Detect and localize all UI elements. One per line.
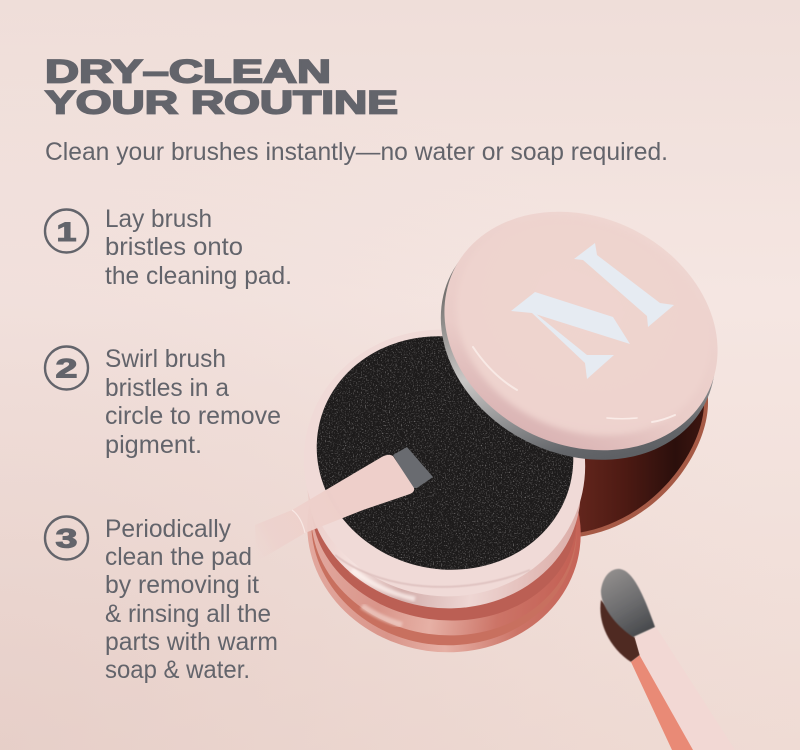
handle	[255, 455, 414, 562]
pot rim	[279, 304, 610, 622]
lid	[399, 168, 757, 506]
lid edge	[405, 168, 757, 494]
step 3 text: & rinsing all the	[105, 600, 271, 628]
bristles	[393, 447, 433, 488]
step 3 text: by removing it	[105, 571, 259, 599]
logo M	[511, 243, 674, 379]
metal band	[291, 348, 597, 626]
step 3 text: clean the pad	[105, 543, 252, 571]
icon: number 3: 3	[56, 524, 78, 554]
step 3 text	[105, 515, 278, 684]
pale handle	[635, 627, 735, 750]
silver rim	[399, 172, 757, 506]
product: open tin	[308, 212, 718, 652]
icon: number 2	[45, 346, 88, 390]
subtitle: Clean your brushes instantly—no water or soap required.	[45, 138, 668, 166]
step 1 text: the cleaning pad.	[105, 262, 292, 290]
rim shade	[335, 555, 530, 587]
title: YOUR ROUTINE	[45, 84, 398, 120]
handle seam	[292, 510, 305, 533]
band highlight	[352, 570, 415, 599]
step 3 text: soap & water.	[105, 656, 250, 684]
step 1 text: bristles onto	[105, 233, 243, 261]
small brush in pad	[255, 447, 433, 562]
icon: number 1	[45, 210, 88, 252]
icon: number 2: 2	[56, 354, 78, 384]
title: DRY–CLEAN	[45, 54, 331, 90]
brown bristles	[600, 600, 640, 662]
step 2	[45, 345, 281, 459]
icon: number 3	[45, 516, 88, 560]
step 1 text: Lay brush	[105, 205, 212, 233]
step 3	[45, 515, 278, 684]
step 2 text: circle to remove	[105, 402, 281, 430]
step 1	[45, 205, 292, 290]
coral handle strip	[631, 655, 694, 750]
lid highlights	[473, 347, 675, 422]
title	[45, 54, 398, 120]
step 2 text: pigment.	[105, 431, 202, 459]
step 1 text	[105, 205, 292, 290]
step 2 text: Swirl brush	[105, 345, 226, 373]
pot body	[308, 330, 586, 652]
step 3 text: Periodically	[105, 515, 231, 543]
lid interior	[560, 385, 708, 537]
step 2 text: bristles in a	[105, 374, 229, 402]
large brush	[600, 569, 735, 750]
step 3 text: parts with warm	[105, 628, 278, 656]
grey bristles	[601, 569, 655, 637]
step 2 text	[105, 345, 281, 459]
lid face	[420, 176, 746, 476]
sponge pad	[310, 330, 580, 575]
icon: number 1: 1	[56, 217, 76, 247]
copper base	[308, 512, 581, 652]
